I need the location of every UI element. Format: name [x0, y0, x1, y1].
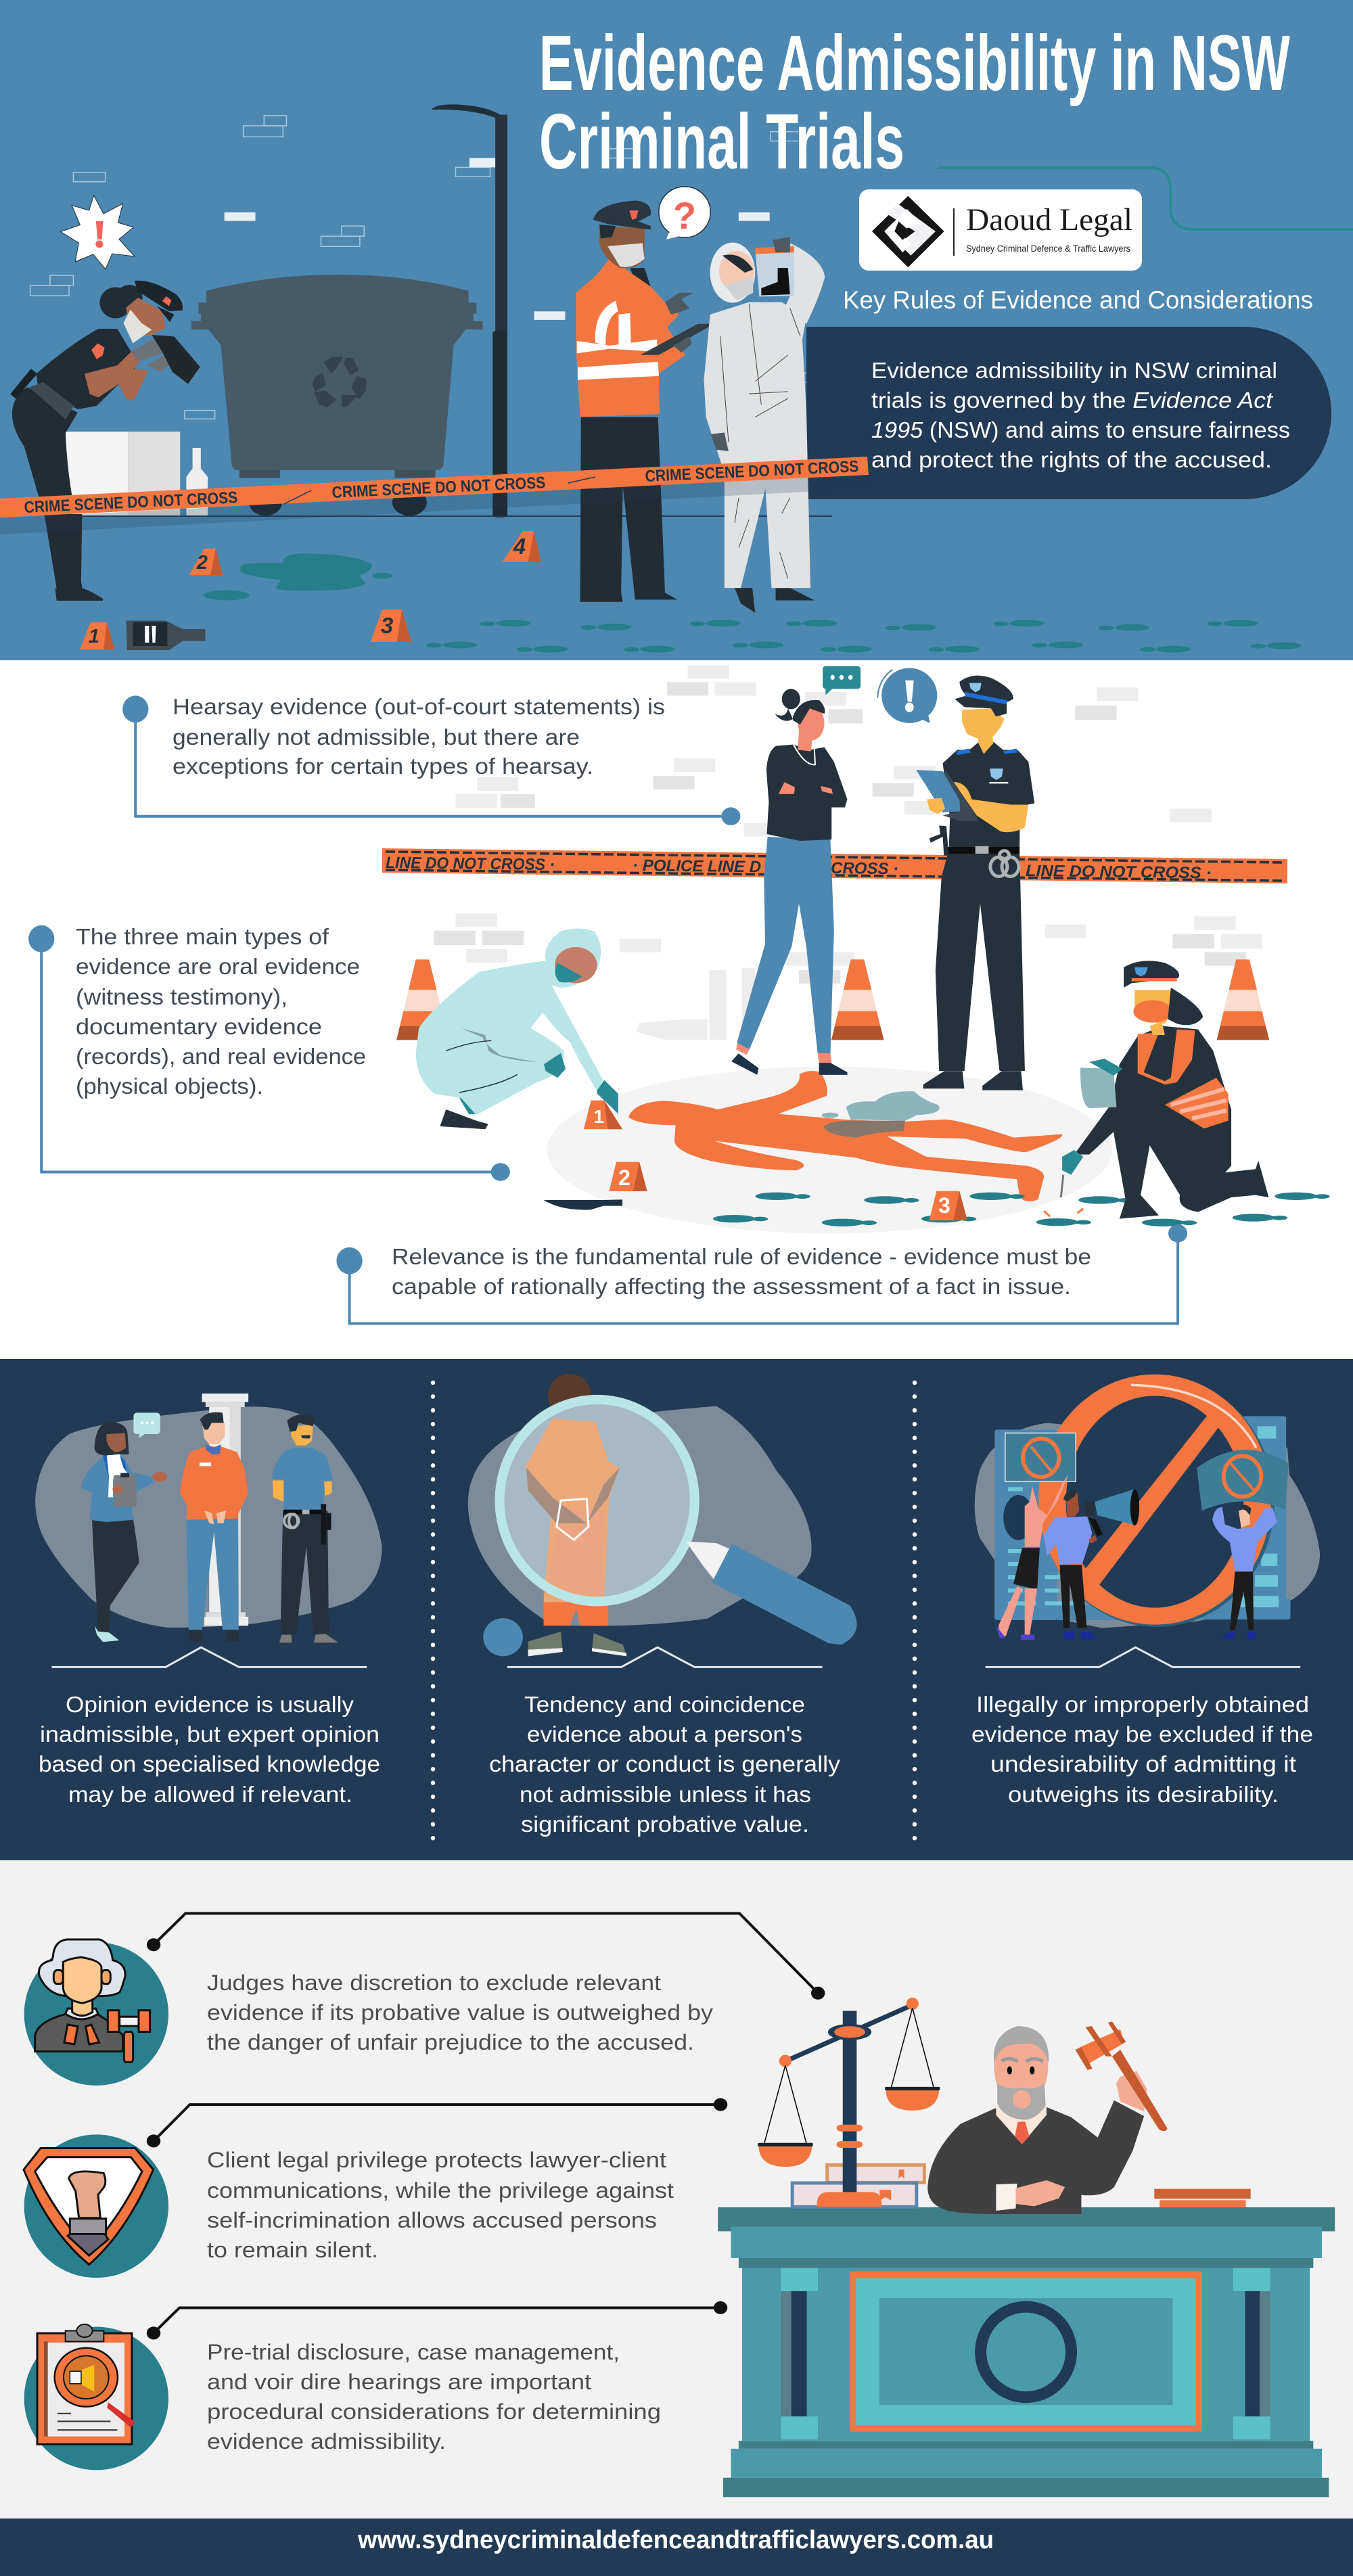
marker numbers [593, 1106, 950, 1218]
text: client legal privilege: self-incrimination allows accused persons [207, 2208, 657, 2232]
footprints [426, 620, 1301, 653]
evidence markers and spill [80, 531, 541, 650]
police officer [916, 676, 1034, 1071]
text: client legal privilege [207, 2148, 674, 2262]
footer bar with website [0, 2518, 1353, 2576]
text: opinion evidence: Opinion evidence is usually [66, 1692, 354, 1717]
text: three types of evidence: documentary evidence [76, 1014, 322, 1039]
faint wall bricks [30, 116, 845, 419]
text: relevance [392, 1244, 1091, 1299]
text: improperly obtained [971, 1692, 1313, 1807]
logo card: Daoud Legal: Daoud Legal [966, 202, 1132, 237]
text: three types of evidence: (physical objects). [76, 1074, 263, 1099]
evidence markers and spill: 3 [381, 613, 393, 638]
police line tape: LINE DO NOT CROSS · [1026, 862, 1212, 882]
text: opinion evidence [39, 1692, 380, 1807]
traffic cones [396, 959, 1269, 1040]
title [539, 19, 1290, 185]
shoes of officer [923, 1071, 1023, 1090]
officer in orange jacket [576, 187, 714, 602]
text: pre-trial disclosure: and voir dire hearings are important [207, 2370, 591, 2394]
evidence markers and spill: 2 [196, 552, 208, 574]
text: judges discretion: the danger of unfair prejudice to the accused. [207, 2030, 694, 2054]
text: tendency and coincidence [489, 1692, 841, 1837]
text: judges discretion: Judges have discretion to exclude relevant [207, 1971, 661, 1995]
title: Criminal Trials [539, 97, 904, 185]
text: improperly obtained: evidence may be excluded if the [971, 1722, 1313, 1747]
chalk outline scene [544, 1067, 1330, 1233]
icon: shield with fist [24, 2148, 154, 2265]
text: improperly obtained: outweighs its desirability. [1008, 1782, 1279, 1807]
icon: judge with wig [35, 1939, 150, 2062]
text: pre-trial disclosure: Pre-trial disclosure, case management, [207, 2340, 620, 2364]
text: judges discretion [207, 1971, 713, 2054]
ground line [68, 515, 832, 517]
panel: crime scene key rules [0, 660, 1353, 1360]
teal decorative connector [938, 168, 1353, 229]
marker numbers: 2 [618, 1166, 630, 1190]
wheelie bin with recycle symbol [191, 275, 482, 515]
text: tendency and coincidence: significant probative value. [521, 1812, 809, 1837]
text: pre-trial disclosure [207, 2340, 661, 2454]
crime scene tape: CRIME SCENE DO NOT CROSS [24, 488, 238, 517]
illustration: opinion evidence [35, 1394, 382, 1642]
illustration: banned evidence protest [975, 1375, 1320, 1640]
connector lines [28, 695, 1187, 1324]
intro text [871, 358, 1290, 472]
street lamp [432, 104, 507, 518]
exclamation starburst [61, 196, 135, 269]
text: hearsay [173, 694, 665, 779]
evidence markers and spill: 4 [513, 534, 526, 559]
logo card: Daoud Legal [859, 189, 1142, 271]
books and scales of justice [758, 1998, 940, 2207]
text: hearsay: generally not admissible, but there are [173, 724, 580, 750]
woman witness [731, 689, 847, 1075]
navy intro pill [806, 327, 1331, 499]
text: tendency and coincidence: not admissible unless it has [520, 1782, 811, 1807]
white box and bottle [64, 432, 208, 515]
text: relevance: capable of rationally affecting the assessment of a fact in issue. [392, 1274, 1071, 1299]
text: pre-trial disclosure: evidence admissibility. [207, 2429, 446, 2454]
text: judges discretion: evidence if its probative value is outweighed by [207, 2000, 713, 2025]
panel: discretion and procedure [0, 1860, 1353, 2518]
black connectors [147, 1914, 825, 2339]
judge figure with gavel [927, 2021, 1251, 2214]
crime scene tape: CRIME SCENE DO NOT CROSS [331, 474, 546, 502]
text: hearsay: Hearsay evidence (out-of-court statements) is [173, 694, 665, 719]
text: three types of evidence: (records), and real evidence [76, 1044, 366, 1069]
text: opinion evidence: inadmissible, but expert opinion [40, 1722, 380, 1747]
text: hearsay: exceptions for certain types of hearsay. [173, 754, 593, 779]
crouching forensic officer [416, 928, 618, 1129]
policewoman with camera [10, 281, 200, 601]
illustration: magnified prisoner [468, 1374, 857, 1656]
footer bar with website: www.sydneycriminaldefenceandtrafficlawyers.com.au [357, 2526, 994, 2554]
police line tape: CROSS · [831, 859, 898, 878]
intro text: and protect the rights of the accused. [871, 447, 1272, 472]
marker numbers: 1 [593, 1106, 604, 1127]
text: tendency and coincidence: character or conduct is generally [489, 1751, 841, 1776]
text: three types of evidence: evidence are oral evidence [76, 954, 360, 979]
police line tape: · POLICE LINE D [633, 856, 761, 876]
kneeling officer [1044, 961, 1268, 1219]
judge's bench [718, 2207, 1335, 2497]
pointer rules [52, 1647, 1300, 1667]
marker numbers: 3 [938, 1193, 950, 1218]
question mark bubble glyph: ? [673, 194, 696, 237]
intro text: 1995 (NSW) and aims to ensure fairness [871, 417, 1290, 442]
text: three types of evidence: (witness testimony), [76, 984, 288, 1009]
evidence markers and spill: 1 [89, 626, 99, 647]
dotted dividers [433, 1383, 915, 1839]
icon: clipboard with magnifier [37, 2324, 135, 2444]
police line tape [382, 848, 1287, 883]
text: three types of evidence [76, 924, 366, 1099]
subtitle: Key Rules of Evidence and Considerations [843, 286, 1313, 314]
panel: header scene [0, 0, 1353, 660]
police line tape: LINE DO NOT CROSS · [386, 854, 555, 874]
text: opinion evidence: may be allowed if relevant. [68, 1782, 352, 1807]
forensic investigator in white suit [704, 237, 825, 613]
text: three types of evidence: The three main types of [76, 924, 329, 949]
speech bubbles [823, 666, 937, 723]
teal icon circles [24, 1942, 168, 2470]
text: opinion evidence: based on specialised knowledge [39, 1751, 380, 1776]
crime scene tape: CRIME SCENE DO NOT CROSS [645, 457, 859, 486]
pale wall bricks [434, 665, 1262, 1040]
text: client legal privilege: to remain silent. [207, 2238, 378, 2262]
text: tendency and coincidence: evidence about a person's [527, 1722, 802, 1747]
text: relevance: Relevance is the fundamental rule of evidence - evidence must be [392, 1244, 1091, 1269]
panel: navy three columns [0, 1359, 1353, 1860]
text: client legal privilege: communications, while the privilege against [207, 2178, 674, 2203]
text: pre-trial disclosure: procedural considerations for determining [207, 2399, 661, 2424]
logo card: Daoud Legal: Sydney Criminal Defence & Traffic Lawyers [966, 243, 1130, 254]
text: improperly obtained: Illegally or improperly obtained [976, 1692, 1309, 1717]
intro text: trials is governed by the Evidence Act [871, 388, 1274, 413]
crime scene tape [0, 457, 869, 534]
text: tendency and coincidence: Tendency and coincidence [524, 1692, 805, 1717]
text: client legal privilege: Client legal privilege protects lawyer-client [207, 2148, 666, 2172]
intro text: Evidence admissibility in NSW criminal [871, 358, 1277, 383]
text: improperly obtained: undesirability of admitting it [990, 1751, 1296, 1776]
